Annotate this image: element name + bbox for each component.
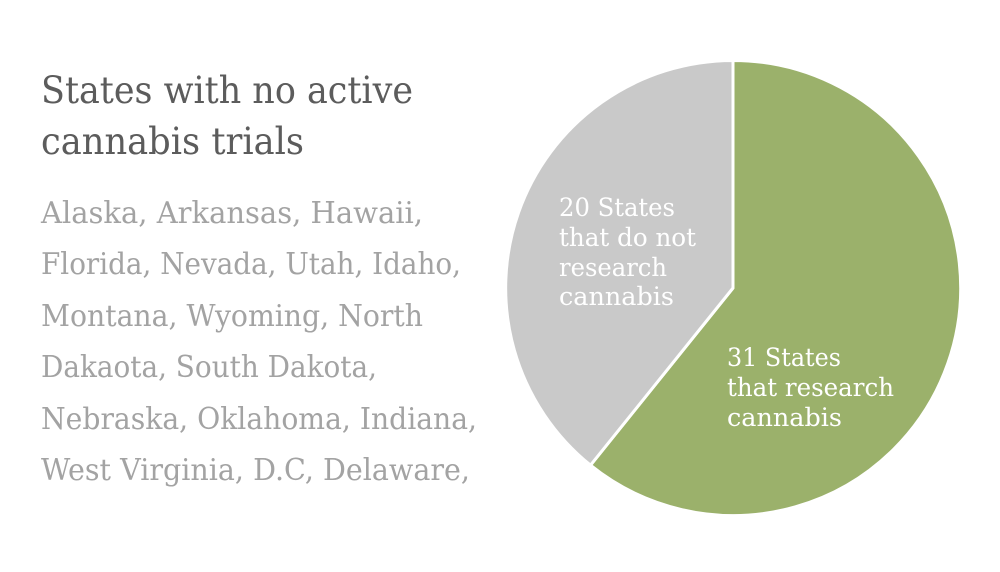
pie chart bbox=[506, 60, 961, 515]
text block: list of states: Alaska, Arkansas, Hawaii, bbox=[40, 196, 423, 231]
text block: list of states: Dakaota, South Dakota, bbox=[41, 350, 377, 385]
label: 20 states: cannabis bbox=[559, 282, 674, 311]
pie slice: 20 states that do not research cannabis bbox=[506, 60, 733, 465]
title bbox=[41, 69, 413, 163]
text block: list of states: West Virginia, D.C, Delaware, bbox=[41, 453, 470, 488]
label: 20 states: that do not bbox=[559, 223, 696, 252]
label: 31 states: cannabis bbox=[727, 403, 842, 432]
text block: list of states bbox=[40, 196, 477, 488]
text block: list of states: Florida, Nevada, Utah, Idaho, bbox=[41, 247, 461, 282]
label: 31 states: 31 States bbox=[727, 343, 841, 372]
pie slice: 31 states that research cannabis bbox=[590, 60, 961, 515]
label: 20 states: 20 States bbox=[559, 193, 675, 222]
text block: list of states: Montana, Wyoming, North bbox=[41, 299, 423, 334]
text block: list of states: Nebraska, Oklahoma, Indiana, bbox=[41, 402, 477, 437]
label: 31 states bbox=[727, 343, 894, 432]
label: 20 states: research bbox=[559, 253, 667, 282]
title: cannabis trials bbox=[41, 120, 304, 163]
label: 20 states bbox=[559, 193, 696, 311]
label: 31 states: that research bbox=[727, 373, 894, 402]
title: States with no active bbox=[41, 69, 413, 112]
